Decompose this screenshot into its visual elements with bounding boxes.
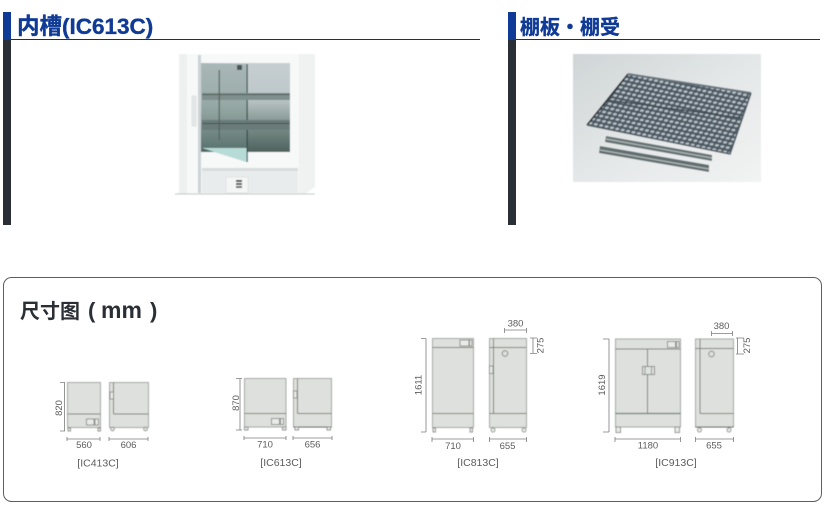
heading: shelves: 棚板・棚受 [520,16,620,39]
model label: [IC913C] [655,457,697,469]
panel: dimension drawings [4,278,822,502]
model label: [IC613C] [260,457,302,469]
photo: incubator interior with open door [175,54,315,194]
dimension: width 710: 710 [257,440,273,450]
panel outline [4,278,822,502]
heading rule [516,39,820,40]
dimension: height 870: 870 [231,395,242,411]
dimension: 275: 275 [742,338,753,353]
heading: dimensions in mm [20,297,157,323]
dimension: width 560: 560 [76,440,92,451]
heading: interior: 内槽(IC613C) [17,14,153,39]
dimension: depth 655: 655 [706,440,722,452]
model label: [IC813C] [457,457,499,469]
drawing: IC613C [231,378,332,469]
dimension: 380: 380 [508,318,523,330]
dimension: height 1611: 1611 [414,375,424,395]
drawing: IC413C [54,382,148,470]
heading rule [11,39,480,40]
dimension: depth 656: 656 [305,440,320,450]
side view [294,378,332,430]
dimension: 380: 380 [714,321,729,332]
dimension lines [60,382,148,441]
drawing: IC913C [597,321,753,469]
right section bar [508,12,516,225]
front view [244,378,286,430]
left section bar [3,12,11,225]
dimension: width 710: 710 [445,441,461,452]
dimension lines [421,328,537,442]
dimension: depth 606: 606 [121,440,136,451]
drawing: IC813C [414,318,546,469]
heading: dimensions in mm: mm [101,297,142,323]
heading: dimensions in mm: 尺寸图 [20,300,80,323]
dimension: width 1180: 1180 [638,440,658,452]
dimension lines [603,331,744,442]
heading: dimensions in mm: ( [88,298,96,323]
section: shelf and shelf supports [508,12,820,225]
dimension: 275: 275 [536,338,546,353]
photo: perforated shelf and rails [573,54,761,182]
side view [110,382,148,431]
side view [490,338,526,432]
dimension: depth 655: 655 [500,441,515,452]
front view [68,382,100,431]
side view [696,339,734,432]
front view [432,338,474,432]
front view [616,339,680,432]
section: interior IC613C [3,12,480,225]
model label: [IC413C] [77,458,119,470]
heading: dimensions in mm: ) [150,298,157,323]
dimension: height 1619: 1619 [597,374,608,396]
dimension: height 820: 820 [54,400,65,416]
dimension lines [236,378,332,440]
